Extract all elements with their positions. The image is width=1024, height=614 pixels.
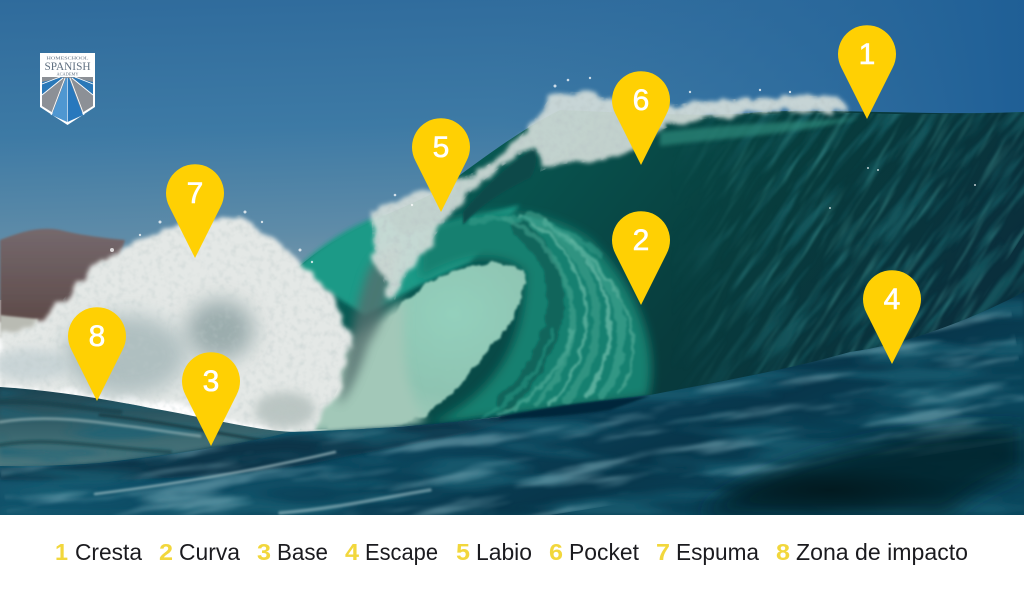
- logo text: SPANISH: [44, 59, 91, 73]
- legend item 6: 6: [549, 539, 563, 565]
- pin 8: [68, 307, 126, 401]
- pin 2: [612, 211, 670, 305]
- legend item 1: Cresta: [75, 539, 142, 565]
- logo text: HOMESCHOOL: [46, 56, 89, 60]
- legend item 7: 7: [656, 539, 670, 565]
- pin 7: 7: [187, 177, 203, 210]
- legend item 1: 1: [55, 539, 68, 565]
- wall streak texture: [698, 112, 1024, 383]
- pin 4: 4: [884, 283, 900, 316]
- lip crevice: [463, 148, 536, 225]
- swell texture: [0, 298, 1024, 515]
- swell dark crest line: [0, 412, 530, 480]
- white legend band: [0, 515, 1024, 614]
- foam grain: [2, 215, 346, 428]
- legend: [55, 539, 968, 565]
- legend item 5: Labio: [476, 539, 532, 565]
- barrel bottom mist: [295, 300, 425, 434]
- logo text: [44, 56, 91, 76]
- logo: Homeschool Spanish Academy shield: [40, 53, 95, 125]
- pin 8: 8: [89, 320, 105, 353]
- legend item 8: Zona de impacto: [796, 539, 968, 565]
- left foreground water: [0, 387, 294, 466]
- foam: whitewater explosion: [0, 215, 350, 435]
- legend item 3: Base: [277, 539, 328, 565]
- deep shadow at lower right: [700, 425, 1024, 515]
- swirl body: [420, 213, 651, 425]
- crest highlight band: [660, 118, 860, 146]
- pin 4: [863, 270, 921, 364]
- pin 3: 3: [203, 365, 219, 398]
- lip spray along crest: [372, 92, 850, 300]
- sky: [0, 0, 1024, 300]
- pin 7: [166, 164, 224, 258]
- legend item 7: Espuma: [676, 539, 759, 565]
- pin 6: [612, 71, 670, 165]
- legend item 8: 8: [776, 539, 790, 565]
- wave wall: [295, 110, 1024, 430]
- grey spray inside barrel: [336, 260, 392, 405]
- legend item 4: 4: [345, 539, 359, 565]
- logo text: ACADEMY: [56, 72, 79, 76]
- shield rays: [42, 77, 93, 122]
- teal swirl shoulder: [295, 205, 520, 315]
- barrel interior: [325, 263, 523, 432]
- dark water at edge: [500, 396, 650, 419]
- pin 6: 6: [633, 84, 649, 117]
- foam streaks: [95, 452, 430, 513]
- pin 1: 1: [859, 38, 875, 71]
- pin 5: [412, 118, 470, 212]
- main foreground swell: [0, 292, 1024, 515]
- spray droplets: [110, 77, 976, 263]
- pin 5: 5: [433, 131, 449, 164]
- legend item 3: 3: [257, 539, 271, 565]
- legend item 5: 5: [456, 539, 470, 565]
- pin 1: [838, 25, 896, 119]
- pin 3: [182, 352, 240, 446]
- legend item 4: Escape: [365, 539, 438, 565]
- swirl strands: [470, 215, 633, 420]
- legend item 2: Curva: [179, 539, 240, 565]
- pin 2: 2: [633, 224, 649, 257]
- mountains: [0, 229, 125, 330]
- legend item 2: 2: [159, 539, 173, 565]
- spray grain: [360, 85, 860, 305]
- distant buildings: [0, 315, 38, 338]
- legend item 6: Pocket: [569, 539, 640, 565]
